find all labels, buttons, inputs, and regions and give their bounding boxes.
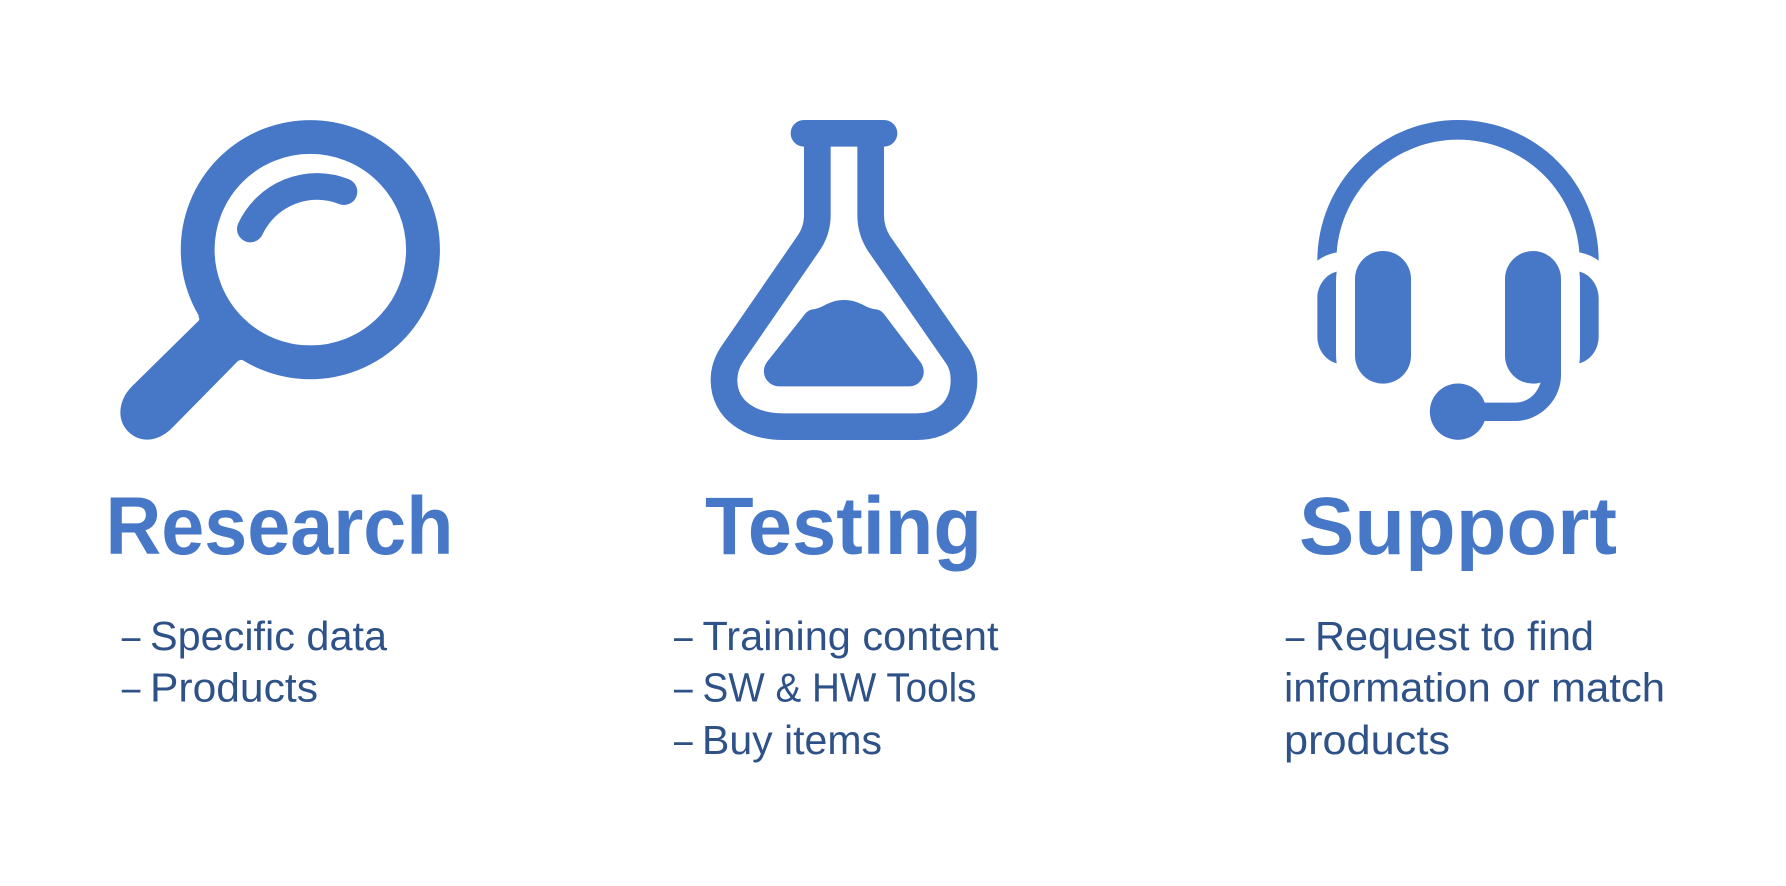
heading: Research: Research — [106, 481, 454, 572]
list: research items: Specific data — [150, 613, 387, 659]
list: testing items: – — [674, 665, 693, 711]
panel: support — [1284, 120, 1665, 763]
icon: flask — [724, 120, 964, 427]
list: support text: – — [1286, 613, 1305, 659]
list: testing items — [674, 613, 999, 763]
list: support text: products — [1284, 717, 1450, 763]
panel: testing — [674, 120, 999, 763]
list: testing items: Buy items — [702, 717, 882, 763]
list: testing items: – — [674, 717, 693, 763]
list: research items: – — [122, 613, 141, 659]
list: support text: information or match — [1284, 665, 1665, 711]
panel: research — [106, 137, 454, 711]
list: testing items: – — [674, 613, 693, 659]
list: support text: Request to find — [1315, 613, 1594, 659]
icon: magnifying glass — [120, 137, 423, 440]
icon: headset — [1317, 120, 1599, 440]
list: testing items: Training content — [702, 613, 999, 659]
heading: Support: Support — [1299, 481, 1617, 572]
list: research items: Products — [150, 665, 318, 711]
list: testing items: SW & HW Tools — [702, 665, 976, 711]
list: research items: – — [122, 665, 141, 711]
list: research items — [122, 613, 387, 711]
heading: Testing: Testing — [705, 481, 982, 572]
list: support text — [1284, 613, 1665, 763]
